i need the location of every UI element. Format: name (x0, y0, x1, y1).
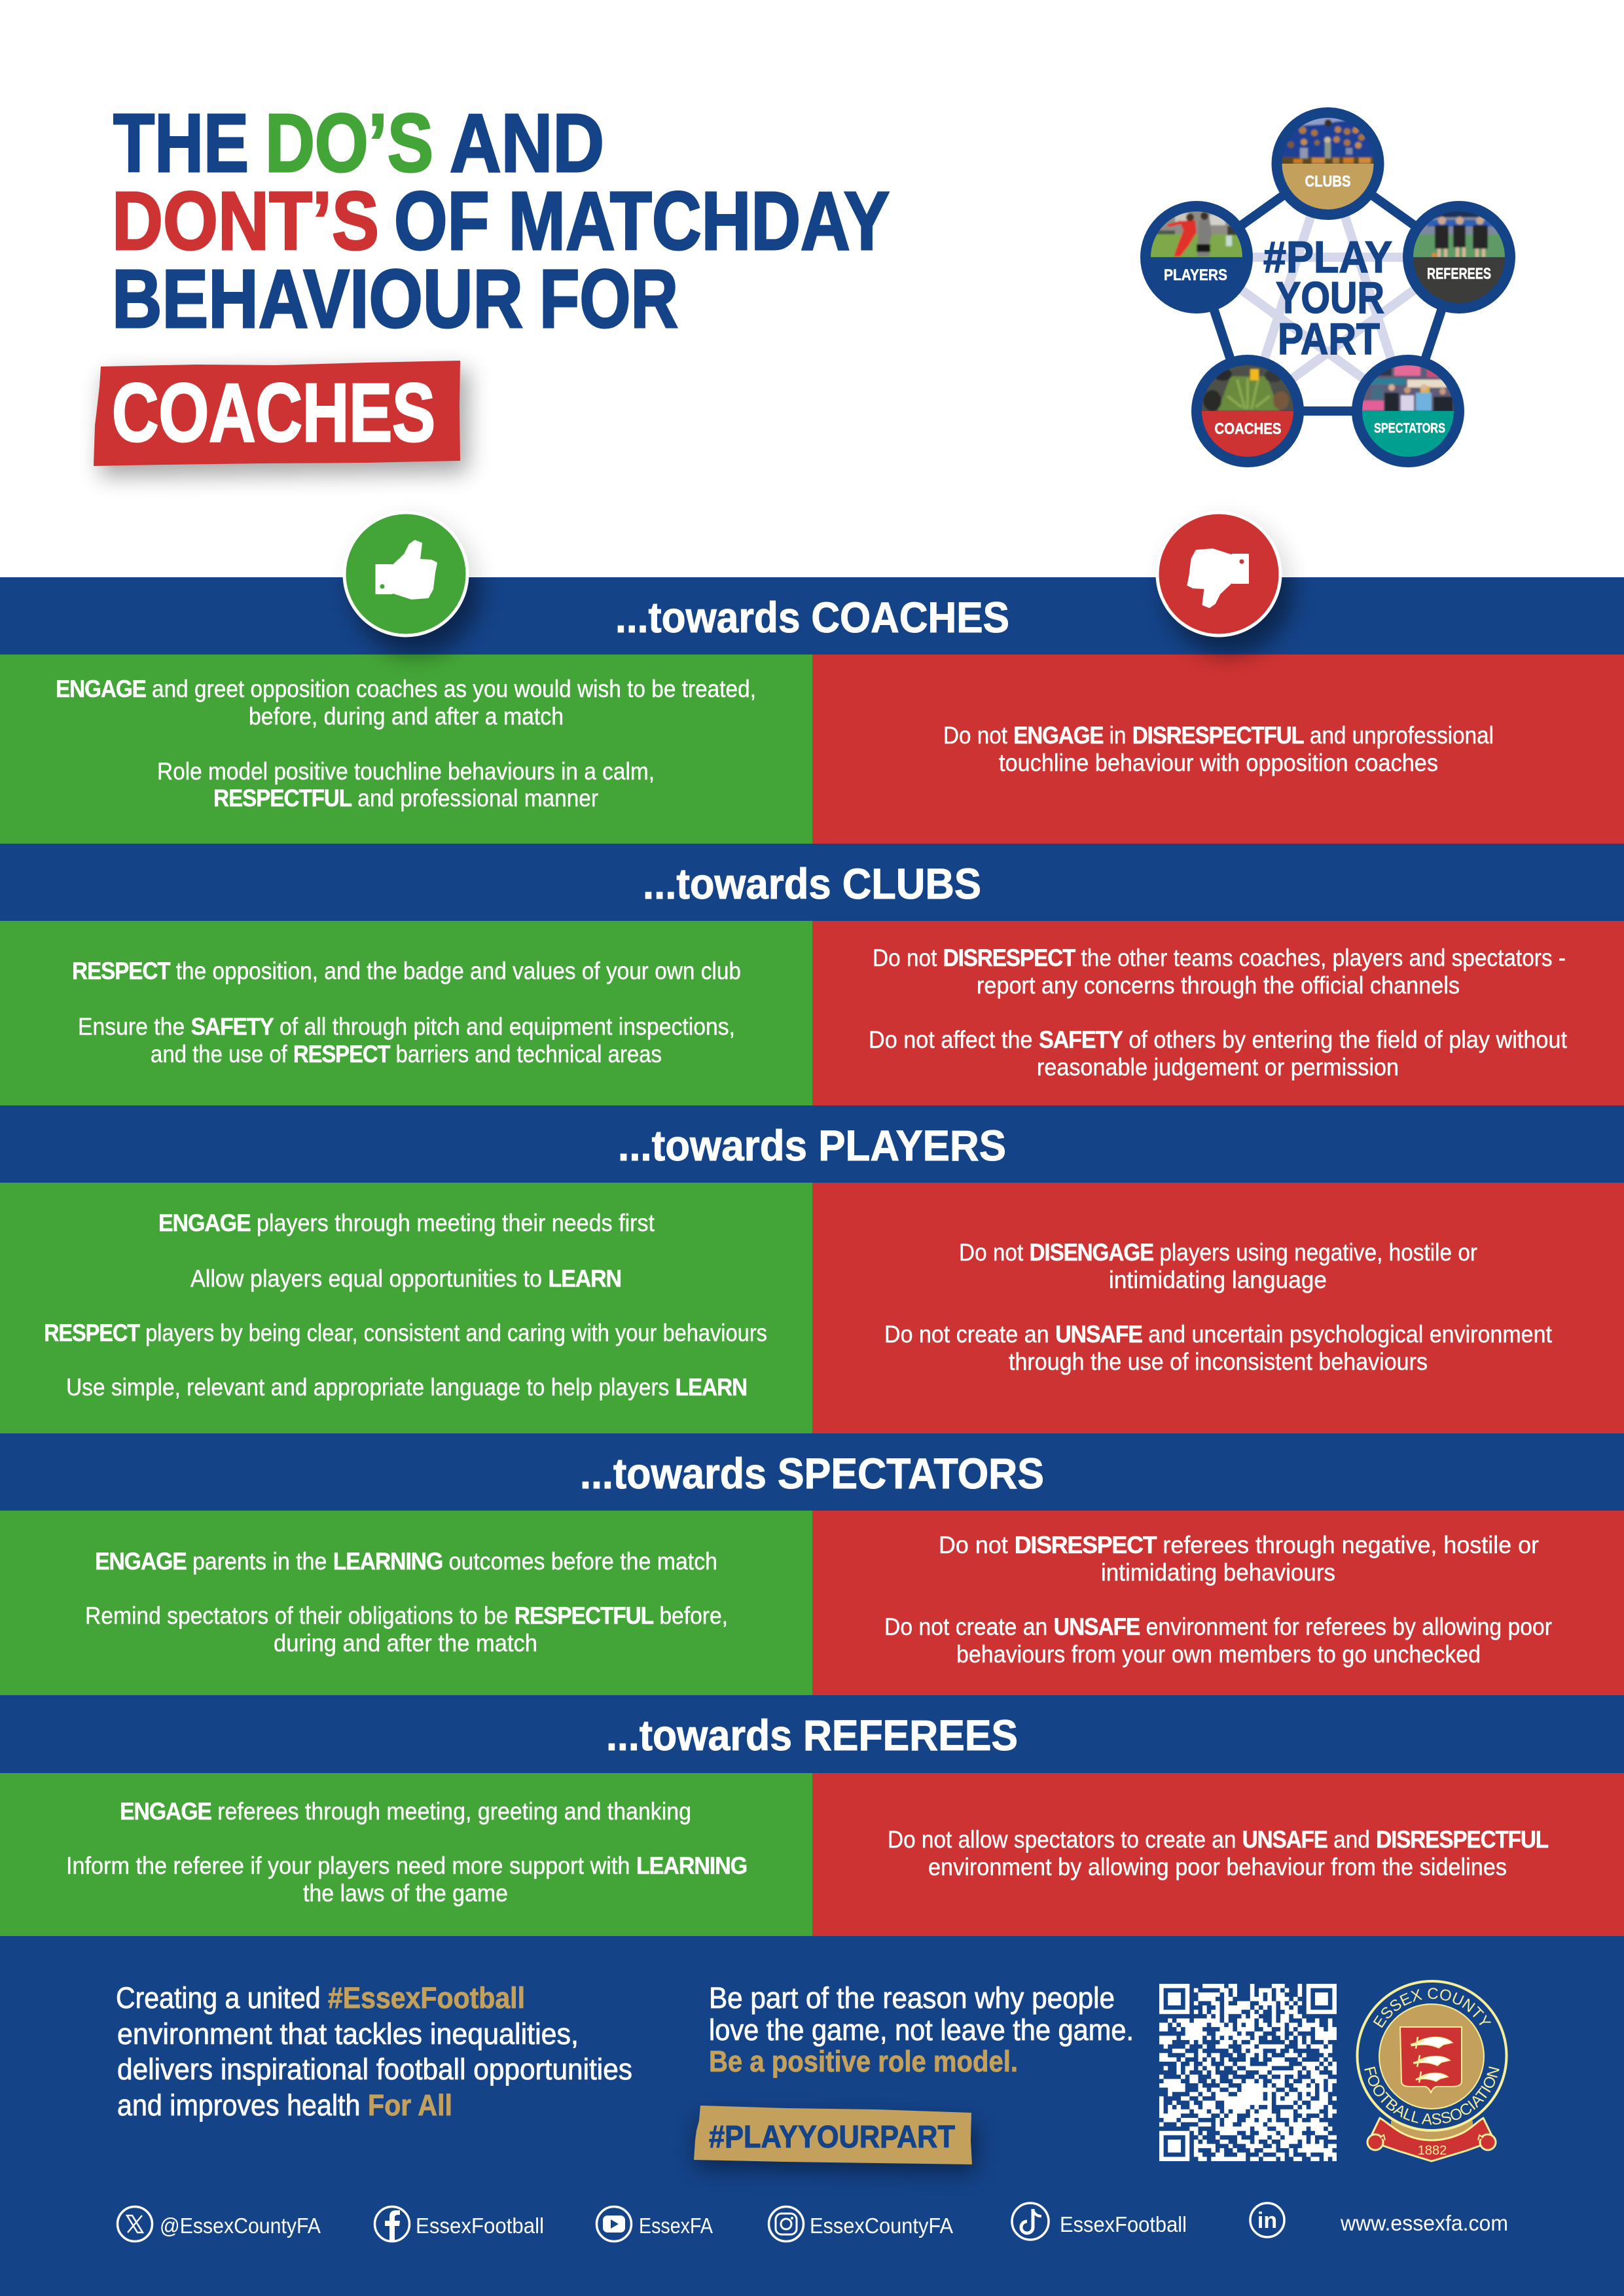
do panel: and the use of RESPECT barriers and technical areas (151, 1041, 662, 1067)
do panel: Inform the referee if your players need more support with LEARNING (66, 1852, 747, 1879)
social: x (118, 2207, 321, 2241)
hashtag patch: #PLAYYOURPART (709, 2120, 955, 2155)
do panel: Role model positive touchline behaviours in a calm, (157, 758, 655, 785)
role model statement: Be part of the reason why people (709, 1981, 1115, 2015)
heading: ...towards CLUBS (643, 859, 981, 908)
play your part wordmark (1263, 232, 1392, 364)
hashtag patch (694, 2106, 977, 2173)
dont panel: behaviours from your own members to go unchecked (956, 1641, 1481, 1668)
do panel: ENGAGE and greet opposition coaches as you would wish to be treated, (56, 675, 756, 702)
title (112, 97, 890, 345)
dont panel: Do not DISRESPECT the other teams coaches, players and spectators - (873, 944, 1566, 971)
social: instagram (768, 2207, 953, 2241)
dont panel: reasonable judgement or permission (1037, 1054, 1399, 1081)
node: players (1140, 201, 1253, 314)
ring (1358, 1981, 1507, 2130)
play your part wordmark: PART (1278, 314, 1380, 364)
essex county fa badge (1356, 1980, 1508, 2162)
heading: ...towards SPECTATORS (580, 1449, 1044, 1498)
do panel (0, 655, 812, 844)
do panel (0, 1773, 812, 1936)
dont panel (812, 1183, 1624, 1433)
node: spectators (1352, 355, 1464, 467)
section: towards coaches (0, 577, 1624, 844)
social: x: @EssexCountyFA (160, 2214, 321, 2238)
do panel: RESPECT the opposition, and the badge and values of your own club (72, 958, 741, 984)
heading band (0, 1433, 1624, 1511)
do panel: Ensure the SAFETY of all through pitch and equipment inspections, (78, 1013, 735, 1040)
dont panel: Do not DISRESPECT referees through negative, hostile or (939, 1532, 1539, 1558)
star lines (1197, 164, 1459, 411)
ring text: ESSEX COUNTY (1373, 1988, 1491, 2028)
role model statement: Be a positive role model. (709, 2045, 1018, 2078)
essex county fa badge: 1882 (1418, 2144, 1447, 2158)
social: linkedin (1250, 2203, 1284, 2237)
play your part wordmark: #PLAY (1263, 232, 1392, 282)
heading: ...towards REFEREES (606, 1711, 1018, 1759)
footer statement: delivers inspirational football opportunities (117, 2053, 632, 2086)
social: youtube: EssexFA (639, 2214, 713, 2238)
dont panel: environment by allowing poor behaviour from the sidelines (928, 1854, 1507, 1880)
social: facebook: EssexFootball (416, 2214, 544, 2238)
do panel: RESPECT players by being clear, consistent and caring with your behaviours (44, 1319, 767, 1346)
dont panel: Do not create an UNSAFE environment for referees by allowing poor (884, 1613, 1552, 1640)
title: DONT’S (112, 175, 379, 267)
dont panel (812, 1511, 1624, 1695)
dont panel: Do not allow spectators to create an UNSAFE and DISRESPECTFUL (888, 1826, 1549, 1853)
role model statement (709, 1981, 1134, 2078)
title: OF MATCHDAY (394, 175, 890, 267)
do panel: RESPECTFUL and professional manner (213, 785, 598, 812)
heading band (0, 1695, 1624, 1773)
title: FOR (539, 253, 678, 345)
dont panel: touchline behaviour with opposition coaches (999, 749, 1438, 776)
do panel: ENGAGE parents in the LEARNING outcomes before the match (95, 1548, 717, 1575)
do panel: during and after the match (274, 1630, 537, 1657)
social: tiktok: EssexFootball (1060, 2212, 1187, 2236)
heading: ...towards COACHES (615, 593, 1009, 641)
dont panel: report any concerns through the official channels (977, 972, 1460, 999)
section: towards clubs (0, 844, 1624, 1105)
do panel (0, 921, 812, 1105)
section: towards referees (0, 1695, 1624, 1936)
heading band (0, 844, 1624, 921)
node: clubs: CLUBS (1305, 173, 1351, 190)
title: BEHAVIOUR (112, 253, 523, 345)
do panel (0, 1183, 812, 1433)
do panel: before, during and after a match (249, 703, 564, 730)
play your part pentagon diagram (1140, 107, 1515, 467)
ribbon (1368, 2118, 1495, 2161)
title: THE (113, 97, 249, 189)
do panel: ENGAGE players through meeting their needs first (158, 1210, 655, 1236)
heading band (0, 1105, 1624, 1183)
footer statement: Creating a united #EssexFootball (116, 1981, 525, 2015)
gold backing under ribbon (1391, 2121, 1473, 2144)
icon: thumbs up (343, 511, 480, 655)
role model statement: love the game, not leave the game. (709, 2013, 1134, 2047)
icon: thumbs down (1156, 511, 1293, 655)
social: tiktok (1012, 2203, 1187, 2240)
do panel: Use simple, relevant and appropriate language to help players LEARN (66, 1374, 747, 1401)
coaches label patch: COACHES (112, 367, 435, 459)
pentagon outline (1197, 164, 1459, 411)
essex county fa badge: FOOTBALL ASSOCIATION (1364, 2066, 1500, 2125)
node: coaches (1191, 355, 1304, 467)
title: DO’S (265, 97, 433, 189)
dont panel (812, 1773, 1624, 1936)
node: referees (1403, 201, 1515, 314)
play your part wordmark: YOUR (1276, 273, 1384, 323)
footer panel (0, 1936, 1624, 2296)
social: instagram: EssexCountyFA (810, 2214, 953, 2238)
node: players: PLAYERS (1164, 266, 1227, 284)
website: www.essexfa.com (1340, 2211, 1508, 2235)
dont panel: Do not ENGAGE in DISRESPECTFUL and unprofessional (943, 722, 1494, 749)
heading band (0, 577, 1624, 655)
shield (1400, 2027, 1462, 2093)
dont panel (812, 655, 1624, 844)
do panel: the laws of the game (303, 1880, 508, 1907)
node: clubs (1271, 107, 1384, 220)
do panel: Remind spectators of their obligations to be RESPECTFUL before, (85, 1602, 728, 1629)
coaches label patch (94, 361, 469, 476)
footer statement (116, 1981, 632, 2122)
qr code (1159, 1984, 1337, 2161)
dont panel: through the use of inconsistent behaviours (1009, 1348, 1428, 1375)
node: spectators: SPECTATORS (1374, 421, 1445, 436)
section: towards players (0, 1105, 1624, 1433)
social: linkedin: in (1257, 2208, 1277, 2233)
node: coaches: COACHES (1215, 420, 1282, 438)
dont panel: Do not DISENGAGE players using negative, hostile or (959, 1239, 1477, 1266)
do panel (0, 1511, 812, 1695)
dont panel (812, 921, 1624, 1105)
social: facebook (374, 2207, 544, 2241)
footer statement: environment that tackles inequalities, (117, 2017, 579, 2051)
footer statement: and improves health For All (117, 2089, 452, 2122)
dont panel: Do not create an UNSAFE and uncertain psychological environment (884, 1321, 1553, 1348)
do panel: ENGAGE referees through meeting, greeting and thanking (120, 1798, 691, 1825)
dont panel: intimidating language (1109, 1266, 1327, 1293)
dont panel: intimidating behaviours (1101, 1559, 1335, 1586)
do panel: Allow players equal opportunities to LEARN (190, 1265, 621, 1292)
heading: ...towards PLAYERS (618, 1121, 1006, 1170)
dont panel: Do not affect the SAFETY of others by entering the field of play without (869, 1026, 1568, 1053)
node: referees: REFEREES (1427, 265, 1491, 283)
seaxes (1411, 2037, 1453, 2083)
section: towards spectators (0, 1433, 1624, 1695)
title: AND (450, 97, 604, 189)
social: youtube (597, 2207, 713, 2241)
